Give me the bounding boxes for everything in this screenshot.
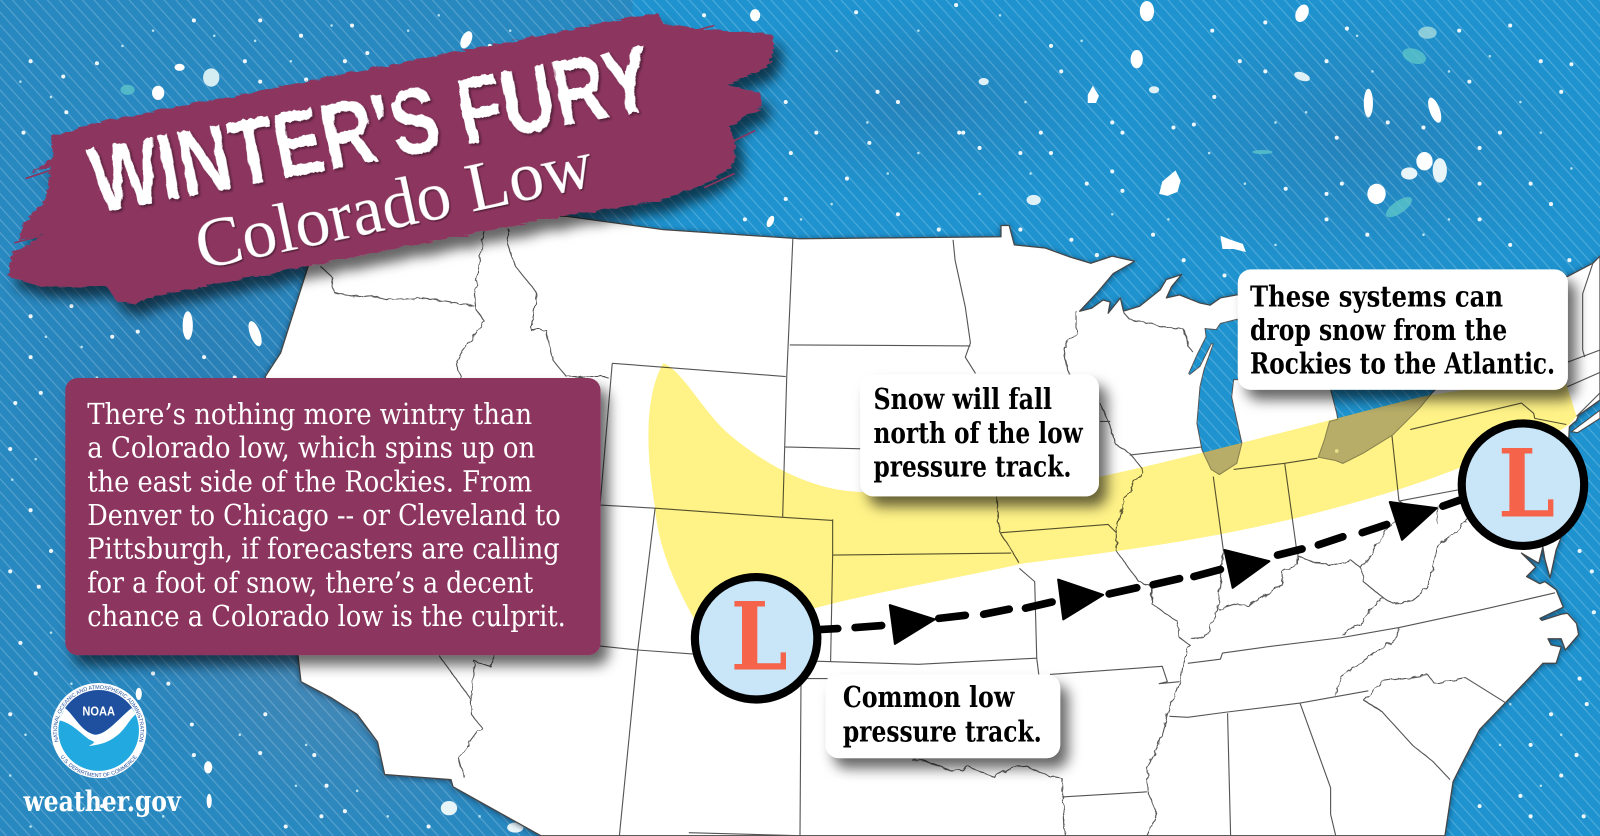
noaa logo [51, 683, 146, 778]
logo: white seabird [59, 708, 136, 746]
low pressure symbol: east: L [1498, 429, 1555, 539]
track arrowheads [890, 502, 1437, 644]
callout: rockies to the atlantic: Rockies to the Atlantic. [1250, 346, 1555, 380]
weather.gov wordmark: weather.gov [23, 786, 182, 818]
land outline [265, 204, 1600, 836]
lake huron and lake erie [1318, 386, 1439, 463]
logo: dark blue sky [65, 690, 132, 735]
callout: rockies to the atlantic: drop snow from the [1250, 313, 1507, 347]
panel: explanation text [65, 378, 601, 655]
callout: rockies to the atlantic: These systems can [1250, 280, 1503, 314]
low pressure track: dashed arrow [819, 500, 1460, 644]
panel: explanation text: chance a Colorado low is the culprit. [87, 599, 566, 633]
lakes under the snow band [1202, 395, 1430, 476]
track dashes [819, 500, 1460, 630]
callout: snow north of track: Snow will fall [873, 382, 1052, 416]
heading: winter's fury: WINTER'S FURY [81, 25, 660, 233]
panel: explanation text: the east side of the Rockies. From [87, 464, 532, 498]
panel: explanation text: There’s nothing more wintry than [87, 397, 532, 431]
callout: snow north of track [860, 374, 1099, 496]
title banner: brush stroke [8, 13, 774, 303]
low pressure symbol: east [1462, 423, 1584, 546]
panel: explanation text: Denver to Chicago -- or Cleveland to [87, 498, 561, 532]
callout: snow north of track: pressure track. [873, 450, 1071, 484]
logo: ring text top: NATIONAL OCEANIC AND ATMOSPHERIC ADMINISTRATION [53, 685, 144, 742]
brush stroke shape [8, 13, 774, 303]
lake michigan [1189, 319, 1250, 474]
panel: explanation text: for a foot of snow, there’s a decent [87, 565, 534, 599]
panel: explanation text: Pittsburgh, if forecasters are calling [87, 532, 560, 566]
callout: rockies to the atlantic [1238, 269, 1568, 390]
callout: common track: pressure track. [843, 714, 1042, 748]
snowfall band: yellow swath [648, 363, 1577, 633]
callout: common track [826, 674, 1060, 758]
panel: explanation text: a Colorado low, which spins up on [87, 431, 535, 465]
long island [1571, 410, 1600, 433]
subheading: colorado low: Colorado Low [188, 126, 600, 285]
logo: noaa wordmark: NOAA [82, 703, 115, 718]
logo: ring text bottom: U.S. DEPARTMENT OF COMMERCE [61, 754, 137, 777]
state borders: rivers [320, 230, 1468, 836]
low pressure symbol: west: L [731, 582, 788, 692]
hatch over lakes [1189, 319, 1439, 474]
low pressure symbol: west [695, 577, 817, 699]
map of the central and eastern United States [265, 204, 1600, 836]
callout: snow north of track: north of the low [873, 416, 1083, 450]
callout: common track: Common low [843, 680, 1015, 714]
banner dry-brush streaks [14, 26, 772, 243]
state borders: straight lines [599, 239, 1600, 836]
